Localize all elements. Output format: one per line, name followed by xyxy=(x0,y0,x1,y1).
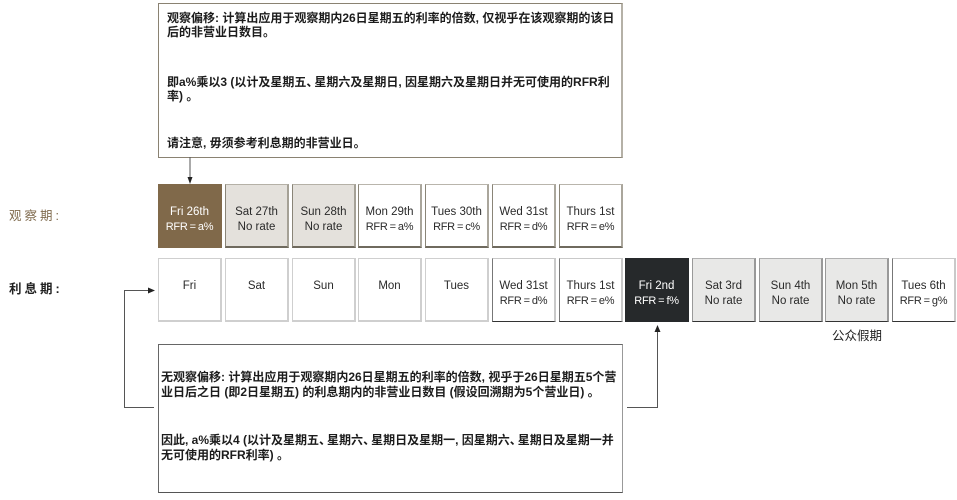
cell: Tues 30th: RFR = c% xyxy=(433,221,480,233)
callout: no observation shift explanation xyxy=(158,344,623,493)
callout text: multiplier explanation xyxy=(167,75,610,103)
cell: Sun xyxy=(292,258,356,322)
cell: Sun 28th: Sun 28th xyxy=(300,206,347,218)
callout text: multiplier explanation: 即a%乘以3 (以计及星期五、星期六及星期日, 因星期六及星期日并无可使用的RFR利 xyxy=(167,75,610,89)
callout text: no observation shift definition: 业日后之日 (即2日星期五) 的利息期内的非营业日数目 (假设回溯期为5个营业日) 。 xyxy=(161,384,600,398)
cell: Tues 30th: Tues 30th xyxy=(431,206,482,218)
cell: Mon xyxy=(358,258,422,322)
arrow: callout to interest period Fri xyxy=(124,288,155,408)
cell: Fri 26th: RFR = a% xyxy=(166,221,213,233)
cell: Wed 31st xyxy=(492,258,556,322)
cell: Fri 2nd xyxy=(625,258,689,322)
cell: Mon: Mon xyxy=(378,280,401,292)
callout text: note: 请注意, 毋须参考利息期的非营业日。 xyxy=(167,136,366,150)
callout text: multiplier explanation: 因此, a%乘以4 (以计及星期五、星期六、星期日及星期一, 因星期六、星期日及星期一并 xyxy=(161,433,614,447)
row: observation period xyxy=(158,184,623,248)
cell: Wed 31st xyxy=(492,184,556,248)
cell: Wed 31st: RFR = d% xyxy=(500,221,547,233)
cell: Sun 28th: No rate xyxy=(305,221,342,233)
cell: Fri 26th: Fri 26th xyxy=(170,206,209,218)
cell: Sun 28th xyxy=(292,184,356,248)
cell: Fri xyxy=(158,258,222,322)
cell: Fri 2nd: Fri 2nd xyxy=(639,280,674,292)
arrow: callout to Fri 26th xyxy=(188,157,192,184)
cell: Fri 26th xyxy=(158,184,222,248)
cell: Wed 31st: RFR = d% xyxy=(500,295,547,307)
cell: Sat 27th: No rate xyxy=(238,221,275,233)
cell: Thurs 1st xyxy=(559,258,623,322)
cell: Tues xyxy=(425,258,489,322)
cell: Sun 4th: Sun 4th xyxy=(771,280,810,292)
callout text: observation shift definition: 观察偏移: 计算出应用于观察期内26日星期五的利率的倍数, 仅视乎在该观察期的该日 xyxy=(167,11,614,25)
cell: Tues 6th: Tues 6th xyxy=(901,280,946,292)
cell: Fri 2nd: RFR = f% xyxy=(634,295,679,307)
cell: Mon 5th: No rate xyxy=(838,295,875,307)
arrow: callout to Fri 2nd xyxy=(627,325,660,408)
callout text: multiplier explanation: 率) 。 xyxy=(167,89,198,103)
cell: Tues 6th xyxy=(892,258,956,322)
callout text: observation shift definition: 后的非营业日数目。 xyxy=(167,25,275,39)
callout text: observation shift definition xyxy=(167,11,614,39)
cell: Mon 29th: RFR = a% xyxy=(366,221,413,233)
callout text: multiplier explanation: 无可使用的RFR利率) 。 xyxy=(161,448,289,462)
cell: Sat 3rd: Sat 3rd xyxy=(705,280,742,292)
cell: Sun 4th: No rate xyxy=(772,295,809,307)
cell: Thurs 1st: Thurs 1st xyxy=(567,206,614,218)
cell: Tues 30th xyxy=(425,184,489,248)
cell: Sat 3rd: No rate xyxy=(705,295,742,307)
callout text: no observation shift definition: 无观察偏移: 计算出应用于观察期内26日星期五的利率的倍数, 视乎于26日星期五5个营 xyxy=(161,370,616,384)
cell: Mon 5th: Mon 5th xyxy=(836,280,877,292)
cell: Wed 31st: Wed 31st xyxy=(499,206,548,218)
callout: observation shift explanation xyxy=(158,3,623,158)
cell: Thurs 1st: RFR = e% xyxy=(567,295,614,307)
cell: Fri: Fri xyxy=(183,280,196,292)
cell: Thurs 1st: Thurs 1st xyxy=(567,280,614,292)
label: public holiday: 公众假期 xyxy=(832,329,882,343)
cell: Mon 5th xyxy=(825,258,889,322)
cell: Thurs 1st xyxy=(559,184,623,248)
cell: Sun 4th xyxy=(759,258,823,322)
cell: Mon 29th xyxy=(358,184,422,248)
callout text: multiplier explanation xyxy=(161,433,614,462)
cell: Sat: Sat xyxy=(248,280,265,292)
cell: Sat 27th: Sat 27th xyxy=(235,206,278,218)
cell: Mon 29th: Mon 29th xyxy=(366,206,413,218)
cell: Tues: Tues xyxy=(444,280,469,292)
label: interest period: 利息期: xyxy=(9,282,63,296)
cell: Wed 31st: Wed 31st xyxy=(499,280,548,292)
cell: Tues 6th: RFR = g% xyxy=(900,295,947,307)
cell: Sun: Sun xyxy=(313,280,334,292)
callout text: no observation shift definition xyxy=(161,370,616,398)
row: interest period xyxy=(158,258,956,322)
cell: Thurs 1st: RFR = e% xyxy=(567,221,614,233)
cell: Sat xyxy=(225,258,289,322)
cell: Sat 3rd xyxy=(692,258,756,322)
label: observation period: 观察期: xyxy=(9,209,62,223)
cell: Sat 27th xyxy=(225,184,289,248)
